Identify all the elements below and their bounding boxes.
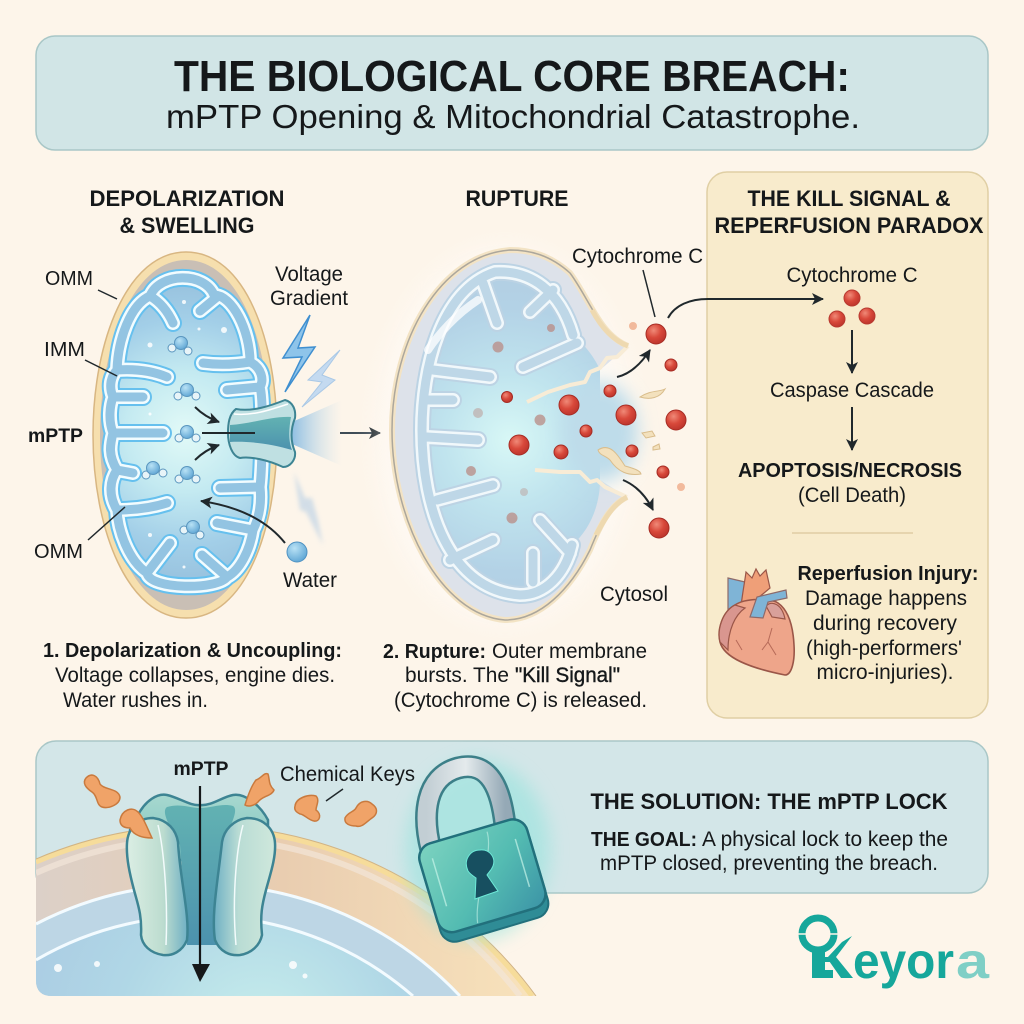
panel heading: REPERFUSION PARADOX [714, 213, 984, 238]
chemical keys [84, 774, 376, 838]
illustration: swollen mitochondrion [93, 252, 277, 618]
icon: mPTP channel [228, 400, 295, 467]
solution text: A physical lock to keep the [702, 828, 948, 851]
caption: step 2: bursts. The [405, 664, 509, 687]
cytochrome c molecules [829, 290, 875, 327]
arrow through channel [192, 786, 210, 982]
labels: mitochondrion 1: Water [283, 569, 337, 592]
solution text [590, 789, 948, 875]
icon: water droplet [287, 542, 307, 562]
labels: mitochondrion 2: Cytosol [600, 583, 668, 606]
glow cone from mPTP [292, 400, 342, 466]
cytochrome c label: Cytochrome C [786, 264, 918, 287]
heading: depolarization and swelling: DEPOLARIZATION [90, 186, 284, 211]
arrows: mitochondrion 1 [195, 407, 380, 543]
title banner: THE BIOLOGICAL CORE BREACH: [174, 52, 850, 101]
left subunit [127, 818, 188, 955]
solution text: THE SOLUTION: THE mPTP LOCK [590, 789, 948, 814]
right subunit [214, 818, 275, 955]
caption: step 1 [43, 640, 342, 712]
cristae [422, 272, 577, 595]
title banner: mPTP Opening & Mitochondrial Catastrophe. [166, 98, 860, 135]
caption: step 2: Outer membrane [492, 640, 647, 663]
logo: Keyora: eyor [853, 933, 954, 989]
caption: step 1: Voltage collapses, engine dies. [55, 664, 335, 687]
arrows: mitochondrion 2 [617, 270, 655, 510]
reperfusion injury text: Reperfusion Injury: [798, 563, 978, 585]
labels: mitochondrion 1: Gradient [270, 287, 348, 310]
icon: mPTP channel close-up [127, 795, 275, 955]
reperfusion injury text: Damage happens [805, 587, 967, 610]
sparkles [148, 300, 227, 568]
cytochrome c particles faded [466, 322, 685, 524]
labels: mitochondrion 1: mPTP [28, 426, 83, 447]
title banner [36, 36, 988, 150]
keyhole [466, 850, 498, 899]
chemical keys label [280, 763, 415, 801]
mPTP label: mPTP [174, 759, 229, 780]
icon: voltage bolts [283, 315, 340, 545]
matrix [110, 278, 262, 586]
apoptosis label: (Cell Death) [798, 484, 906, 507]
apoptosis label [738, 460, 962, 507]
caption: step 2: 2. Rupture: [383, 641, 486, 663]
cytochrome c particles [502, 324, 686, 538]
logo: Keyora: a [956, 933, 990, 989]
reperfusion injury text: (high-performers' [806, 637, 962, 660]
arrow: cytochrome c to kill signal [668, 299, 823, 318]
membrane shards [598, 389, 665, 474]
panel: the solution [36, 741, 988, 996]
icon: padlock [406, 760, 552, 945]
labels: mitochondrion 2: Cytochrome C [572, 245, 703, 268]
solution text: THE GOAL: [591, 829, 697, 851]
inner matrix [422, 272, 600, 595]
caspase cascade label: Caspase Cascade [770, 379, 934, 402]
escaping matrix [562, 382, 638, 482]
torn membrane edges [428, 300, 628, 535]
caption: step 2: (Cytochrome C) is released. [394, 689, 647, 712]
logo: Keyora [798, 918, 990, 989]
panel heading [714, 186, 984, 238]
chemical keys label: Chemical Keys [280, 763, 415, 786]
cristae [110, 278, 262, 586]
heading: rupture: RUPTURE [466, 186, 568, 211]
labels: mitochondrion 1: OMM [45, 268, 93, 290]
labels: mitochondrion 2 [572, 245, 703, 606]
flow arrow 1 [851, 330, 853, 373]
intermembrane space [100, 260, 270, 610]
caption: step 1: Water rushes in. [63, 689, 208, 712]
heading: depolarization and swelling: & SWELLING [120, 213, 254, 238]
flow arrow 2 [851, 407, 853, 450]
water molecules [142, 336, 204, 539]
apoptosis label: APOPTOSIS/NECROSIS [738, 460, 962, 482]
heading: depolarization and swelling [90, 186, 284, 238]
labels: mitochondrion 1: Voltage [275, 263, 343, 286]
illustration: ruptured mitochondrion [380, 250, 686, 620]
caption: step 2 [383, 640, 647, 712]
panel heading: THE KILL SIGNAL & [748, 186, 951, 211]
caption: step 2: "Kill Signal" [515, 664, 620, 687]
outer membrane [93, 252, 277, 618]
membrane close-up [36, 825, 536, 996]
ruptured outer membrane [392, 250, 628, 620]
solution text: mPTP closed, preventing the breach. [600, 852, 938, 875]
icon: heart [719, 569, 794, 675]
labels: mitochondrion 1 [28, 263, 348, 592]
reperfusion injury text [798, 563, 978, 684]
reperfusion injury text: during recovery [813, 612, 957, 635]
reperfusion injury text: micro-injuries). [816, 661, 954, 684]
labels: mitochondrion 1: IMM [44, 339, 85, 361]
ruptured body [392, 250, 628, 620]
panel: kill signal and reperfusion paradox [707, 172, 988, 718]
caption: step 1: 1. Depolarization & Uncoupling: [43, 640, 342, 662]
labels: mitochondrion 1: OMM [34, 541, 83, 563]
